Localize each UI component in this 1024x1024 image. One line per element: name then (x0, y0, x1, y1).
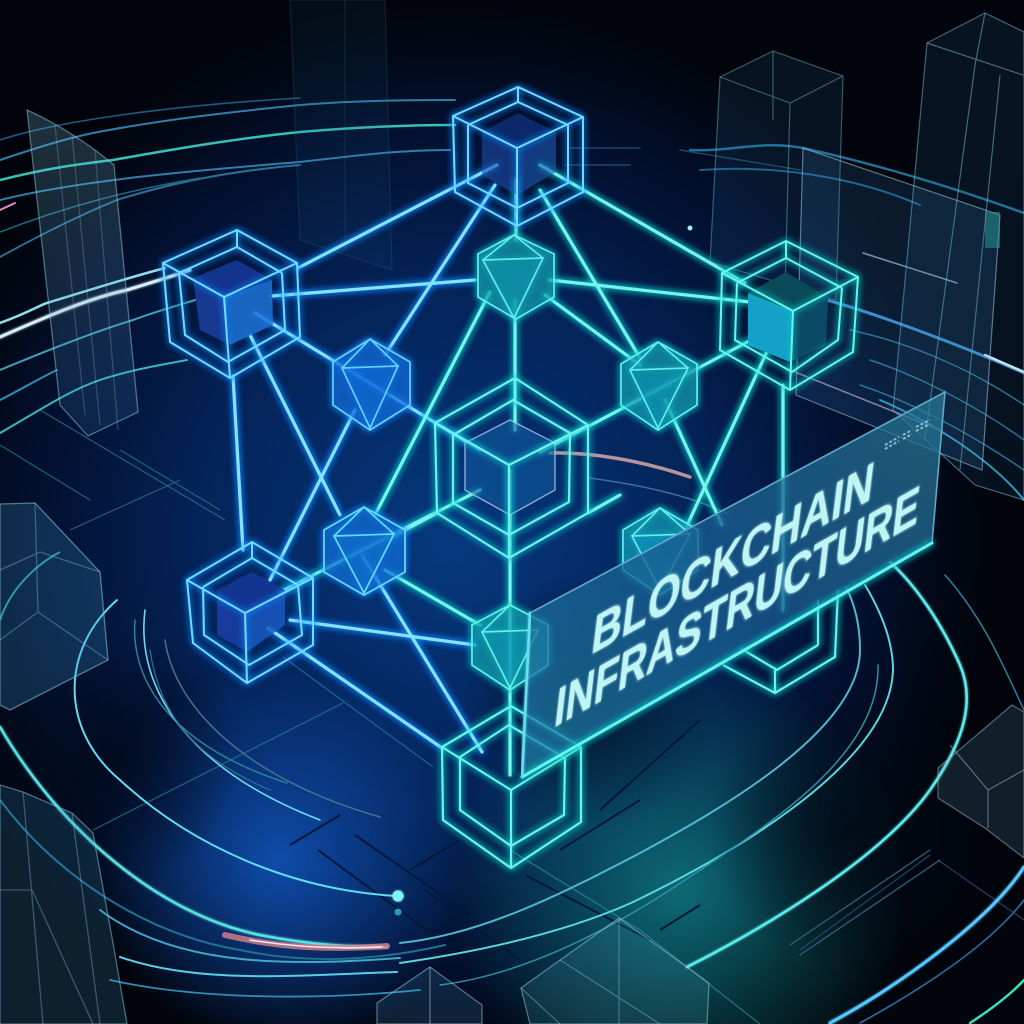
glass block: bottom centre left (377, 967, 482, 1024)
rings: centre pink streak (550, 453, 730, 515)
glass block: bottom centre (521, 918, 709, 1024)
floor grid lines (0, 410, 1024, 1024)
panel edges (510, 392, 945, 777)
node network (163, 87, 858, 868)
glass slab: right (796, 148, 1000, 470)
gem node: right (621, 342, 697, 430)
gem node: lower left (324, 507, 405, 595)
glass slab: left (27, 110, 138, 436)
cube node: bottom (442, 706, 581, 868)
connection lines: blue (233, 165, 497, 752)
glass tower: top right back block (710, 51, 843, 300)
title: INFRASTRUCTURE: INFRASTRUCTURE (552, 473, 923, 740)
glass tower: bottom left (0, 785, 127, 1024)
rings: upper left sweep (0, 98, 800, 433)
rings: lower right sweep (400, 562, 1024, 1023)
gem node: left (333, 339, 410, 430)
gem node: lower right (623, 508, 698, 595)
cube node: bottom right (723, 590, 838, 693)
cube node: centre (435, 378, 588, 558)
cube node: top (453, 87, 583, 226)
cube node: left (163, 230, 300, 378)
rings: lower left sweep (0, 600, 445, 997)
cube node: bottom left (187, 542, 313, 683)
glass tower: top centre back (290, 0, 392, 270)
connection lines: teal (280, 165, 783, 775)
title panel (510, 392, 945, 777)
glass block: left (0, 503, 108, 710)
glowing dots (392, 226, 692, 916)
rings: upper right sweep (690, 145, 1024, 500)
gem node: lower centre (472, 605, 548, 690)
title: BLOCKCHAIN: BLOCKCHAIN (589, 449, 878, 667)
panel body (522, 392, 945, 777)
glass block: bottom right (938, 705, 1024, 858)
glass tower: far right column (893, 13, 1024, 500)
panel corner readout (885, 420, 930, 449)
gem node: top centre (478, 235, 554, 319)
cube node: right (720, 241, 858, 390)
